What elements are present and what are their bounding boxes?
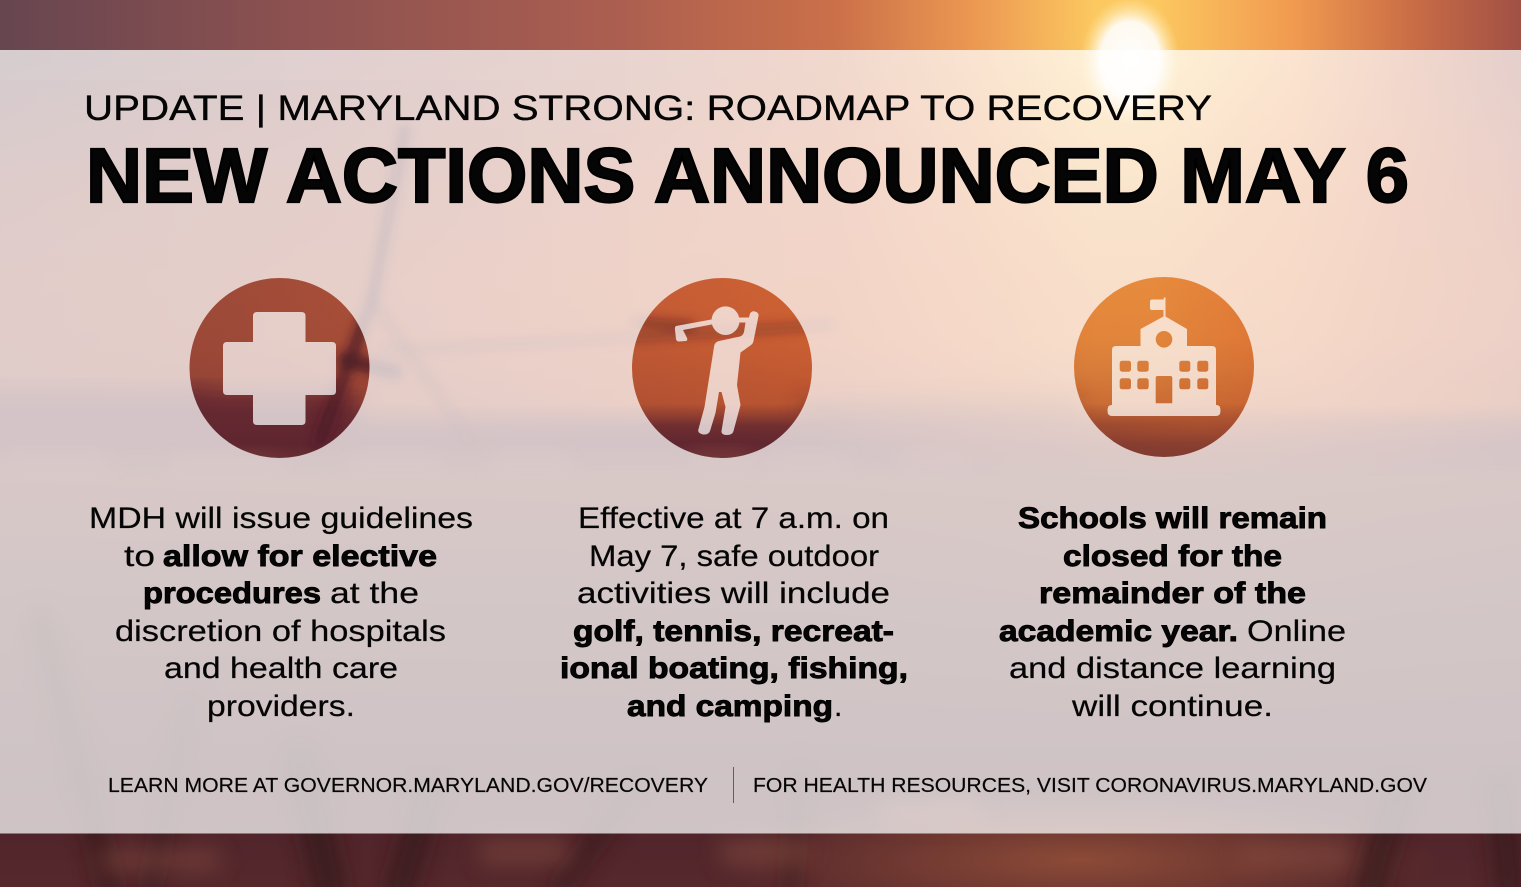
text block: schools closed bbox=[999, 502, 1346, 723]
eyebrow heading: UPDATE | MARYLAND STRONG: ROADMAP TO RECOVERY bbox=[84, 89, 1212, 128]
text block: elective procedures: providers. bbox=[207, 690, 355, 723]
text block: schools closed: and distance learning bbox=[1009, 652, 1336, 685]
text block: elective procedures: to bbox=[124, 540, 155, 573]
text block: outdoor activities: . bbox=[834, 690, 842, 723]
icon: school building bbox=[1074, 277, 1254, 457]
text block: elective procedures: MDH will issue guidelines bbox=[89, 502, 473, 535]
icon: medical cross bbox=[190, 278, 370, 458]
text block: schools closed: will continue. bbox=[1071, 690, 1273, 723]
text block: schools closed: closed for the bbox=[1063, 540, 1282, 573]
text block: elective procedures bbox=[89, 502, 473, 723]
text block: outdoor activities: golf, tennis, recreat- bbox=[573, 615, 894, 648]
text block: elective procedures: allow for elective bbox=[163, 540, 437, 573]
text block: outdoor activities bbox=[560, 502, 908, 723]
footer link: health resources: FOR HEALTH RESOURCES, VISIT CORONAVIRUS.MARYLAND.GOV bbox=[753, 775, 1428, 797]
text block: schools closed: remainder of the bbox=[1039, 577, 1306, 610]
text block: outdoor activities: activities will include bbox=[577, 577, 890, 610]
text block: elective procedures: at the bbox=[330, 577, 419, 610]
text block: schools closed: Schools will remain bbox=[1018, 502, 1327, 535]
text block: outdoor activities: and camping bbox=[627, 690, 833, 723]
text block: outdoor activities: ional boating, fishing, bbox=[560, 652, 908, 685]
text block: outdoor activities: May 7, safe outdoor bbox=[589, 540, 879, 573]
footer link: recovery: LEARN MORE AT GOVERNOR.MARYLAND.GOV/RECOVERY bbox=[108, 775, 708, 797]
icon: golfer bbox=[632, 278, 812, 458]
text block: schools closed: academic year. bbox=[999, 615, 1238, 648]
text block: schools closed: Online bbox=[1247, 615, 1346, 648]
main title: NEW ACTIONS ANNOUNCED MAY 6 bbox=[86, 133, 1409, 219]
text block: elective procedures: procedures bbox=[143, 577, 321, 610]
text block: elective procedures: and health care bbox=[164, 652, 398, 685]
text block: outdoor activities: Effective at 7 a.m. on bbox=[578, 502, 889, 535]
text block: elective procedures: discretion of hospitals bbox=[115, 615, 446, 648]
